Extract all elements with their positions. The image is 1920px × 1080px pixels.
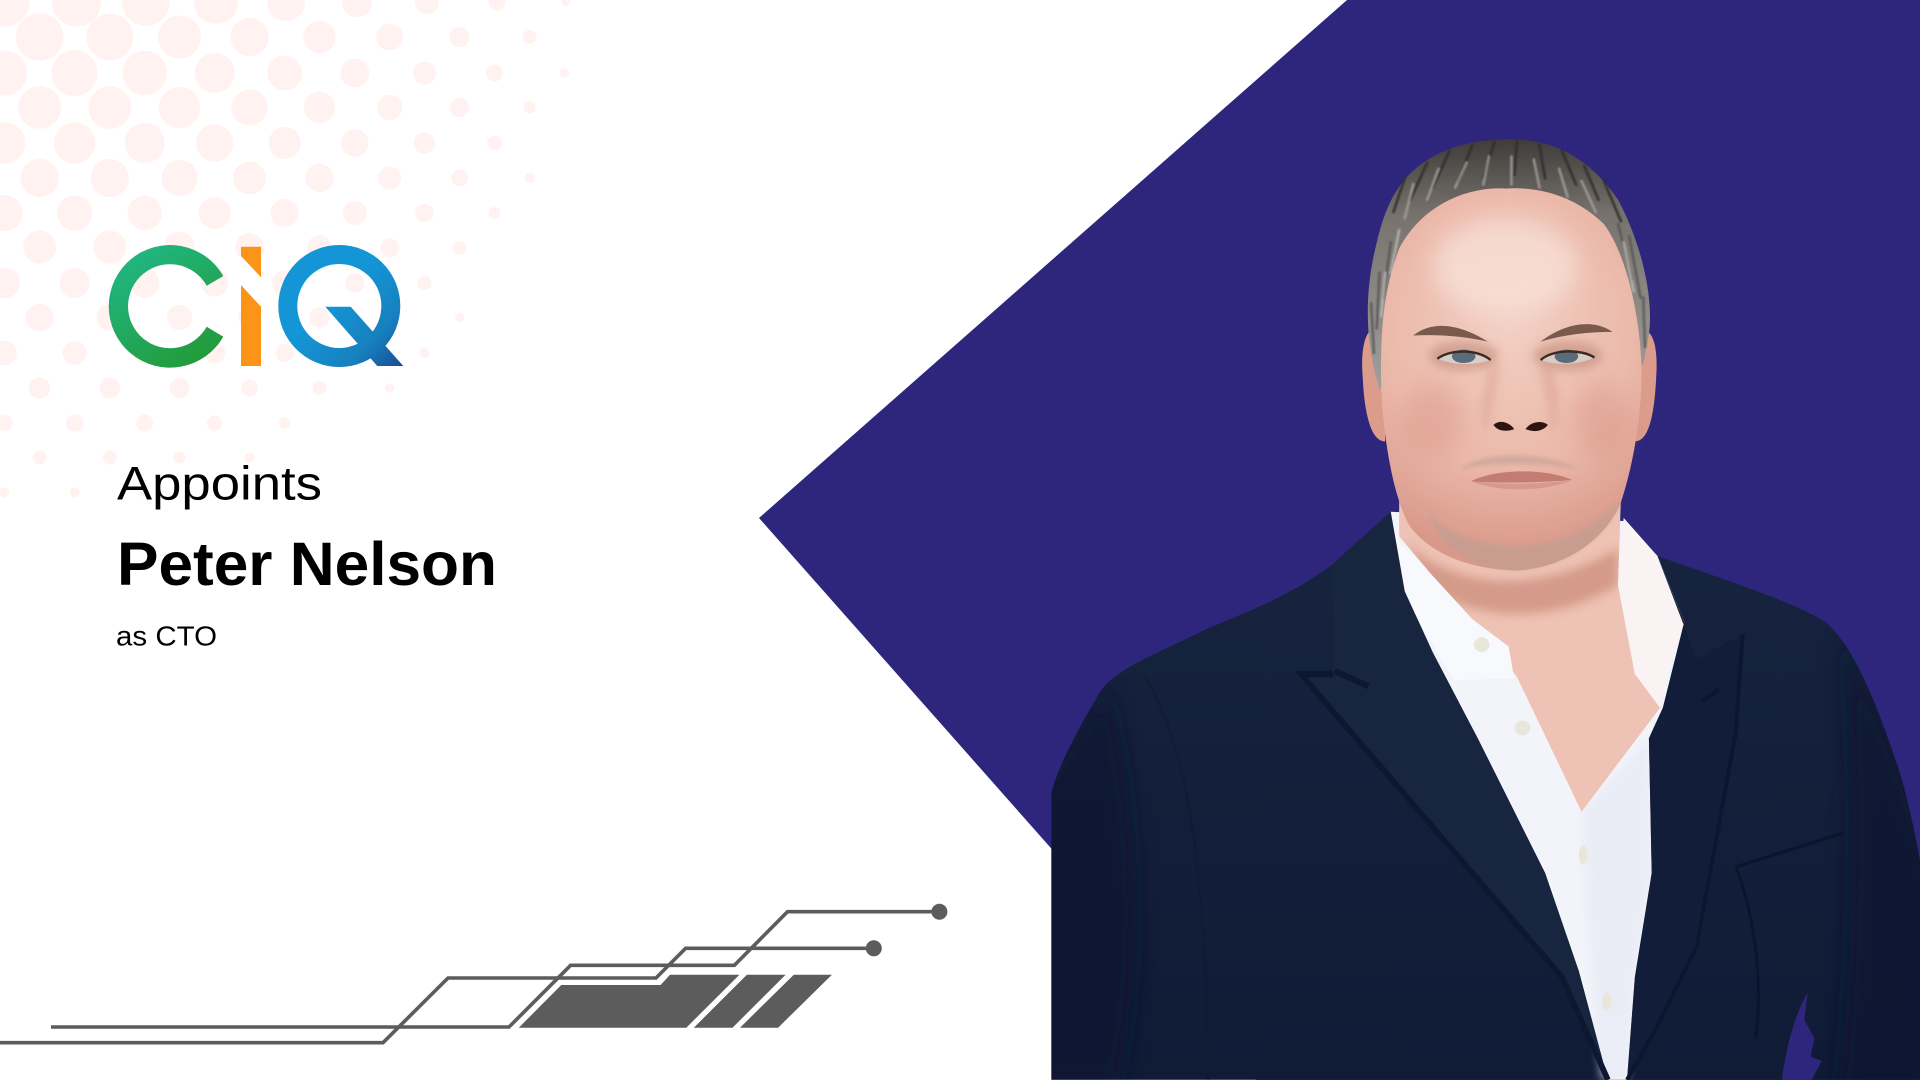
title: Peter Nelson: Peter Nelson: [117, 530, 497, 598]
left lapel: [1334, 512, 1604, 1064]
left eye: [1437, 350, 1491, 364]
CIQ logo: [109, 245, 403, 368]
neck and chest skin: [1399, 481, 1660, 812]
portrait of Peter Nelson: [1029, 139, 1920, 1080]
text: as CTO: as CTO: [116, 621, 217, 652]
jacket: [1051, 512, 1920, 1080]
large parallelogram block: [519, 975, 739, 1028]
jacket pocket: [1736, 833, 1843, 1038]
face: [1381, 188, 1642, 571]
shirt buttons: [1474, 637, 1611, 1011]
left eyebrow: [1413, 326, 1488, 342]
right iris: [1555, 350, 1578, 363]
right ear: [1635, 330, 1657, 441]
shirt shading: [1582, 738, 1652, 1080]
halftone dot pattern: [0, 0, 570, 498]
left ear: [1362, 327, 1385, 441]
right lapel edge: [1627, 634, 1743, 1080]
right lapel: [1627, 557, 1684, 1076]
eye socket shadows: [1429, 341, 1602, 370]
right parallelogram block: [740, 975, 832, 1028]
mouth: [1471, 471, 1572, 489]
stubble: [1427, 503, 1621, 571]
cheek shading: [1402, 383, 1629, 457]
shirt: [1391, 512, 1684, 1080]
right eyebrow: [1541, 324, 1612, 342]
upper lip: [1471, 471, 1572, 483]
left eye white: [1438, 354, 1489, 364]
jacket side shading: [1051, 669, 1920, 1080]
right eye white: [1542, 353, 1593, 364]
nose shading: [1482, 365, 1559, 424]
hair strands: [1371, 141, 1645, 353]
moustache stubble: [1461, 455, 1579, 469]
middle parallelogram block: [694, 975, 786, 1028]
nose: [1482, 365, 1558, 435]
circuit line to upper node: [51, 912, 939, 1027]
right eye: [1541, 350, 1594, 364]
right eyelid line: [1541, 351, 1594, 360]
hair base: [1368, 139, 1650, 389]
bottom right background gap: [1782, 992, 1822, 1080]
upper node dot: [931, 904, 947, 920]
neck shadow: [1405, 542, 1618, 614]
logo letter I: [241, 247, 261, 366]
text: Appoints: Appoints: [117, 457, 322, 510]
left eyelid line: [1437, 352, 1491, 360]
lip line and lower lip: [1471, 480, 1572, 489]
forehead highlight: [1433, 218, 1579, 316]
left iris: [1452, 350, 1475, 363]
right collar: [1618, 518, 1684, 708]
circuit line to lower node: [0, 948, 874, 1043]
lower node dot: [866, 940, 882, 956]
circuit line graphic: [0, 904, 947, 1043]
logo letter Q: [278, 245, 403, 367]
shoulder seam: [1207, 1080, 1210, 1081]
left lapel edge: [1301, 671, 1608, 1080]
hair: [1368, 139, 1650, 389]
nostrils: [1493, 422, 1548, 431]
logo letter C: [109, 245, 223, 368]
navy arrow background shape: [759, 0, 1920, 1080]
left collar: [1391, 512, 1514, 680]
